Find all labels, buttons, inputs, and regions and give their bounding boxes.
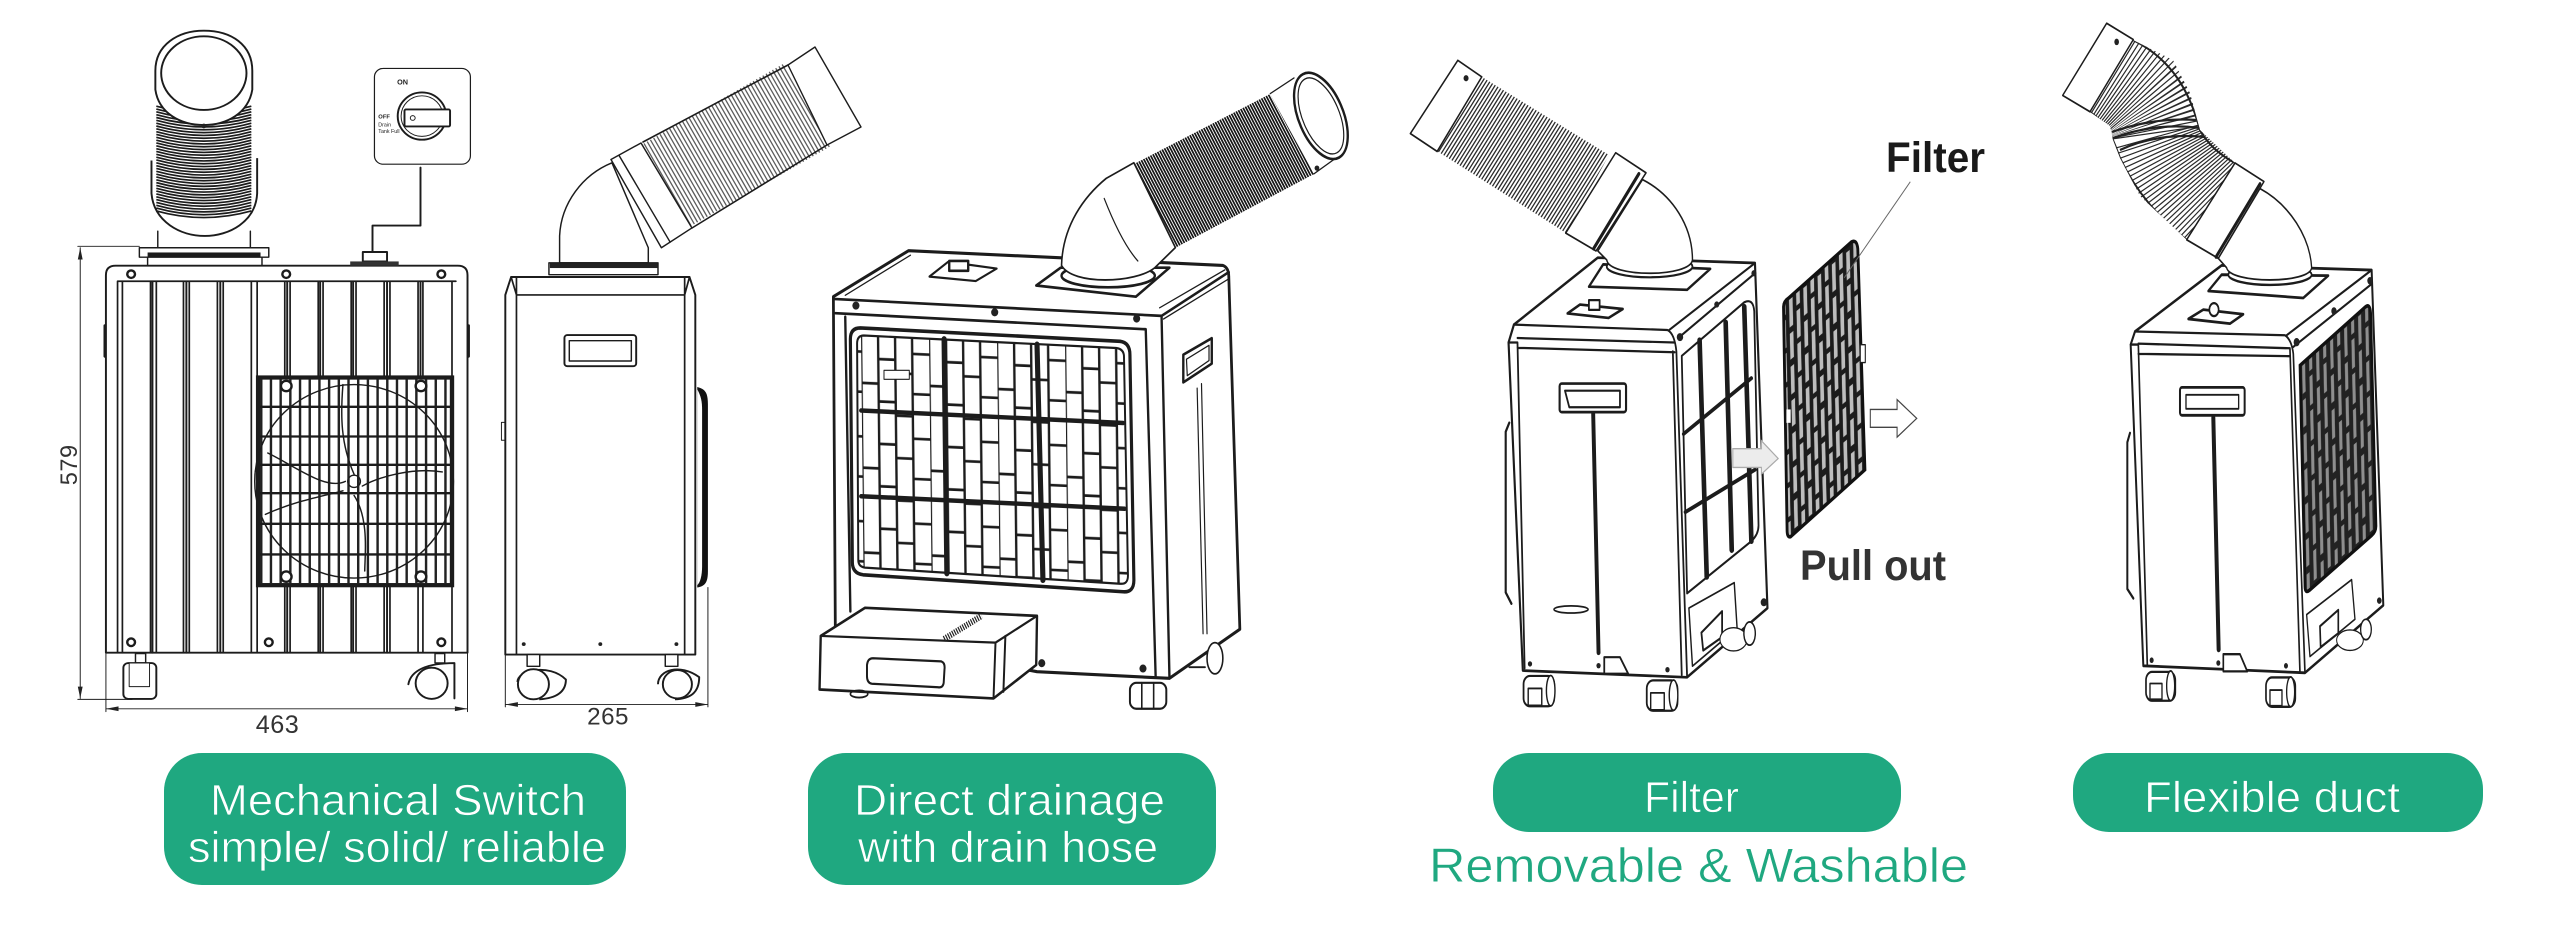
- pill: Mechanical Switch: Mechanical Switch: [210, 776, 586, 825]
- side filter grille: [2300, 306, 2376, 591]
- hose cuffs: [1410, 60, 1646, 251]
- side view hose: [643, 47, 861, 228]
- cabinet: [2127, 265, 2383, 673]
- dimension 463: 463: [256, 711, 299, 739]
- panel: filter unit drawing: [1410, 60, 1917, 711]
- switch detail box: Tank Full: [378, 129, 400, 135]
- pill: Filter: Filter: [1644, 773, 1739, 822]
- panel: flexible duct unit drawing: [2063, 23, 2383, 707]
- front handle and drain slot: [1554, 384, 1628, 674]
- label: Pull out: Pull out: [1800, 542, 1946, 590]
- top switch: [929, 261, 997, 281]
- front cabinet with louvres: [105, 266, 468, 653]
- pill: Direct drainage: Direct drainage: [854, 776, 1165, 825]
- leader line to switch: [373, 168, 420, 252]
- elbow: [1589, 174, 1710, 290]
- dimension 579: [56, 246, 139, 699]
- cabinet: [1506, 258, 1767, 677]
- switch detail box: Drain: [378, 123, 391, 128]
- filter cells in side: [1682, 301, 1759, 593]
- elbow and hose cuffs: [1036, 63, 1359, 297]
- outer pull-out arrow: [1870, 400, 1917, 437]
- dimension 265: [505, 588, 708, 730]
- casters: [1524, 675, 1678, 711]
- leader line to filter: [1844, 182, 1910, 278]
- outlet and rear caster: [2307, 580, 2371, 656]
- pill: Mechanical Switch: simple/ solid/ reliable: [188, 823, 606, 872]
- top switch knob: [350, 252, 399, 266]
- switch detail box: OFF: [378, 115, 390, 120]
- front handle and drain slot: [2180, 387, 2247, 671]
- switch detail box: ON: [397, 79, 408, 86]
- pill: Direct drainage: with drain hose: [857, 823, 1158, 872]
- pill: Flexible duct: Flexible duct: [2144, 773, 2400, 822]
- panel: direct drainage unit drawing: [820, 63, 1359, 709]
- pull-out drain drawer: [820, 608, 1037, 698]
- casters: [2146, 671, 2295, 707]
- side casters: [517, 655, 699, 699]
- front and side elevation drawings: [56, 31, 708, 739]
- hose cuffs: [2063, 23, 2264, 258]
- cabinet body: [833, 251, 1240, 678]
- panel: direct drainage hose hatching: [1130, 120, 1320, 219]
- caption: Removable & Washable: Removable & Washable: [1429, 840, 1968, 893]
- fan grille: [255, 378, 453, 585]
- pill: Flexible duct: [2073, 753, 2483, 832]
- filter grille: [850, 328, 1134, 592]
- panel: filter hose hatching: [1445, 104, 1605, 204]
- panel: mechanical switch technical drawing: [56, 31, 861, 739]
- outlet and rear caster: [1689, 583, 1755, 666]
- top switch: [2188, 303, 2243, 324]
- dimension 579: 579: [56, 444, 83, 485]
- removable filter panel: [1784, 241, 1865, 537]
- label: Filter: Filter: [1886, 134, 1985, 182]
- front casters: [123, 654, 454, 699]
- hose seen from the front: [139, 31, 269, 266]
- pill: Mechanical Switch: [164, 753, 626, 885]
- elbow: [2208, 184, 2328, 298]
- casters: [1130, 643, 1223, 709]
- dimension 463: [106, 654, 468, 739]
- switch detail box: [374, 68, 470, 164]
- inner pull-out arrow: [1733, 441, 1778, 474]
- pill: Direct drainage: [808, 753, 1216, 885]
- top switch: [1567, 300, 1623, 318]
- pill: Filter: [1493, 753, 1901, 832]
- side view cabinet: [501, 143, 708, 655]
- dimension 265: 265: [587, 704, 629, 730]
- panel: flexible duct hose hatching: [2090, 40, 2235, 240]
